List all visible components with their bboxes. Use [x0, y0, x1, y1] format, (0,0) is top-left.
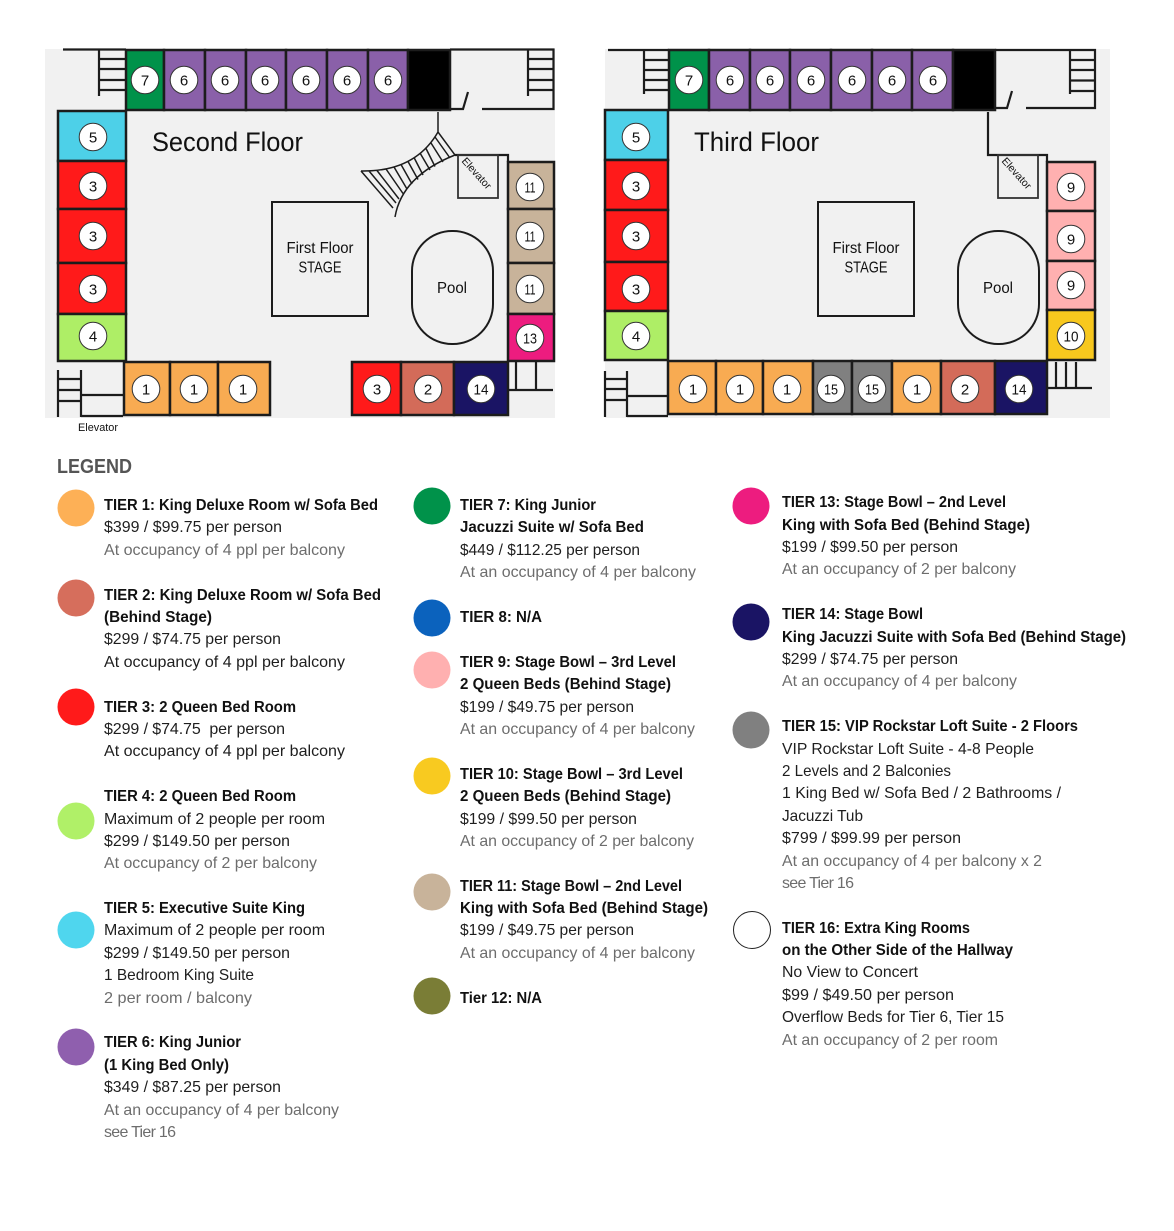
third floor tier number badges: 3 — [632, 228, 640, 246]
legend: tier 14: TIER 14: Stage Bowl — [782, 606, 923, 623]
panel: second floor plan — [45, 49, 555, 418]
legend: tier 15: see Tier 16 — [782, 875, 854, 892]
third floor tier number badges: 5 — [632, 130, 640, 146]
second floor tier number badges: 1 — [239, 382, 247, 398]
legend: tier 15: At an occupancy of 4 per balcony x 2 — [782, 853, 1042, 870]
second floor pool: Pool — [437, 280, 467, 297]
legend: tier 7: Jacuzzi Suite w/ Sofa Bed — [460, 519, 644, 536]
legend: tier 6: see Tier 16 — [104, 1124, 176, 1141]
second floor tier number badges: 6 — [384, 72, 392, 90]
second floor tier number badges: 6 — [302, 72, 310, 90]
legend: tier 3: TIER 3: 2 Queen Bed Room — [104, 699, 296, 716]
legend: tier 15: TIER 15: VIP Rockstar Loft Suite - 2 Floors — [782, 718, 1078, 735]
second floor tier number badges: 6 — [180, 72, 188, 90]
legend: tier 6: (1 King Bed Only) — [104, 1057, 229, 1074]
legend: tier 9 — [414, 652, 695, 738]
third floor tier number badges: 7 — [685, 72, 693, 90]
legend: tier 7: TIER 7: King Junior — [460, 497, 596, 514]
legend: tier 2 — [58, 580, 381, 671]
legend: tier 9: At an occupancy of 4 per balcony — [460, 721, 695, 738]
legend: tier 6: At an occupancy of 4 per balcony — [104, 1102, 339, 1119]
second floor room cells — [58, 50, 554, 415]
third floor tier number badges: 9 — [1067, 232, 1075, 248]
legend: tier 16: on the Other Side of the Hallway — [782, 942, 1013, 959]
legend: tier 1: TIER 1: King Deluxe Room w/ Sofa Bed — [104, 497, 378, 514]
second floor curved staircase — [361, 112, 455, 217]
second floor walls and stairs — [58, 50, 554, 417]
legend: tier 5 — [58, 900, 325, 1007]
legend: tier 10: At an occupancy of 2 per balcony — [460, 833, 694, 850]
second floor tier number badges: 6 — [343, 72, 351, 90]
legend: tier 16: TIER 16: Extra King Rooms — [782, 920, 970, 937]
legend: tier 5: 1 Bedroom King Suite — [104, 967, 254, 984]
legend: tier 2: $299 / $74.75 per person — [104, 631, 281, 648]
legend: tier 2: TIER 2: King Deluxe Room w/ Sofa Bed — [104, 587, 381, 604]
legend: tier 3: At occupancy of 4 ppl per balcony — [104, 743, 345, 760]
third floor tier number badges: 15 — [824, 382, 838, 398]
legend: tier 10 — [414, 758, 694, 850]
legend: tier 11: At an occupancy of 4 per balcony — [460, 945, 695, 962]
second floor tier number badges: 3 — [373, 382, 381, 398]
legend: tier 1: $399 / $99.75 per person — [104, 519, 282, 536]
third floor tier number badges: 10 — [1064, 328, 1078, 346]
label: ground elevator: Elevator — [78, 422, 118, 434]
second floor pool — [412, 231, 493, 344]
second floor tier number badges: 11 — [524, 282, 536, 298]
legend: tier 1: At occupancy of 4 ppl per balcony — [104, 542, 345, 559]
third floor tier number badges: 6 — [888, 72, 896, 90]
legend: tier 9: $199 / $49.75 per person — [460, 699, 634, 716]
legend: tier 3 — [58, 688, 345, 760]
second floor tier number badges: 1 — [142, 382, 150, 398]
legend: tier 10: TIER 10: Stage Bowl – 3rd Level — [460, 766, 683, 783]
legend: tier 11: $199 / $49.75 per person — [460, 922, 634, 939]
legend: tier 14: $299 / $74.75 per person — [782, 651, 958, 668]
legend: tier 15: VIP Rockstar Loft Suite - 4-8 People — [782, 741, 1034, 758]
legend: tier 2: At occupancy of 4 ppl per balcony — [104, 654, 345, 671]
legend: tier 11: TIER 11: Stage Bowl – 2nd Level — [460, 878, 682, 895]
legend: tier 11 — [414, 874, 708, 962]
legend: tier 14: King Jacuzzi Suite with Sofa Bed (Behind Stage) — [782, 629, 1126, 646]
third floor tier number badges: 6 — [766, 72, 774, 90]
second floor tier number badges: 2 — [424, 382, 432, 398]
third floor elevator: Elevator — [999, 155, 1034, 192]
third floor tier number badges: 2 — [961, 382, 969, 398]
legend: tier 7: $449 / $112.25 per person — [460, 542, 640, 559]
second floor tier number badges: 3 — [89, 282, 97, 298]
third floor room cells — [605, 50, 1095, 414]
legend: tier 16 — [734, 912, 1013, 1049]
legend: tier 16: $99 / $49.50 per person — [782, 987, 954, 1004]
legend: tier 12 — [414, 978, 542, 1014]
legend: tier 15: Jacuzzi Tub — [782, 808, 863, 825]
legend: tier 13 — [732, 488, 1030, 578]
legend: tier 13: King with Sofa Bed (Behind Stage) — [782, 517, 1030, 534]
second floor elevator: Elevator — [459, 155, 494, 192]
second floor tier number badges: 14 — [474, 382, 488, 398]
legend: tier 1 — [58, 490, 378, 559]
legend: tier 5: $299 / $149.50 per person — [104, 945, 290, 962]
legend: tier 6: TIER 6: King Junior — [104, 1034, 241, 1051]
legend: tier 4: At occupancy of 2 per balcony — [104, 855, 317, 872]
legend: tier 15 — [732, 712, 1078, 892]
legend: tier 13: TIER 13: Stage Bowl – 2nd Level — [782, 494, 1006, 511]
third floor tier number badges: 15 — [865, 382, 879, 398]
legend: tier 8 — [414, 600, 542, 636]
legend: tier 12: Tier 12: N/A — [460, 990, 542, 1007]
legend: tier 4: Maximum of 2 people per room — [104, 811, 325, 828]
legend: tier 3: $299 / $74.75 per person — [104, 721, 285, 738]
legend: tier 15: 2 Levels and 2 Balconies — [782, 763, 951, 780]
third floor tier number badges: 9 — [1067, 180, 1075, 196]
heading: second floor: Second Floor — [152, 127, 303, 157]
legend: tier 16: No View to Concert — [782, 964, 919, 981]
second floor tier number badges: 13 — [523, 330, 537, 348]
third floor walls and stairs — [605, 50, 1095, 417]
second floor tier number badges: 11 — [524, 228, 536, 246]
second floor tier number badges: 6 — [221, 72, 229, 90]
second floor tier number badges: 4 — [89, 328, 97, 346]
legend: tier 11: King with Sofa Bed (Behind Stage) — [460, 900, 708, 917]
third floor tier number badges: 1 — [913, 382, 921, 398]
legend: tier 2: (Behind Stage) — [104, 609, 212, 626]
heading: third floor: Third Floor — [694, 127, 819, 157]
third floor tier number badges: 3 — [632, 282, 640, 298]
second floor tier number badges: 5 — [89, 130, 97, 146]
legend: tier 13: $199 / $99.50 per person — [782, 539, 958, 556]
third floor tier number badges: 9 — [1067, 278, 1075, 294]
legend: tier 14 — [732, 604, 1126, 690]
legend: tier 16: Overflow Beds for Tier 6, Tier 15 — [782, 1009, 1004, 1026]
third floor stage: First Floor — [832, 240, 900, 257]
legend: tier 14: At an occupancy of 4 per balcony — [782, 673, 1017, 690]
third floor stage — [818, 202, 914, 316]
third floor pool: Pool — [983, 280, 1013, 297]
third floor tier number badges: 1 — [736, 382, 744, 398]
third floor tier number badges: 14 — [1012, 382, 1026, 398]
legend: tier 6 — [58, 1028, 339, 1141]
legend: tier 4 — [58, 788, 325, 872]
third floor stage: STAGE — [844, 260, 888, 276]
legend: tier 4: TIER 4: 2 Queen Bed Room — [104, 788, 296, 805]
second floor tier number badges: 1 — [190, 382, 198, 398]
second floor stage — [272, 202, 368, 316]
legend: tier 10: $199 / $99.50 per person — [460, 811, 637, 828]
second floor tier number badges: 6 — [261, 72, 269, 90]
second floor stage: First Floor — [286, 240, 354, 257]
third floor tier number badges: 1 — [689, 382, 697, 398]
second floor tier number badges: 7 — [141, 72, 149, 90]
second floor tier number badges: 11 — [524, 180, 536, 196]
heading: legend: LEGEND — [57, 456, 132, 478]
legend: tier 9: 2 Queen Beds (Behind Stage) — [460, 676, 671, 693]
legend: tier 8: TIER 8: N/A — [460, 609, 542, 626]
third floor tier number badges: 6 — [929, 72, 937, 90]
legend: tier 15: 1 King Bed w/ Sofa Bed / 2 Bathrooms / — [782, 785, 1062, 802]
third floor tier number badges — [622, 66, 1085, 403]
legend: tier 15: $799 / $99.99 per person — [782, 830, 961, 847]
legend: tier 5: 2 per room / balcony — [104, 990, 252, 1007]
second floor tier number badges: 3 — [89, 178, 97, 196]
legend: tier 5: Maximum of 2 people per room — [104, 922, 325, 939]
legend: tier 7 — [414, 488, 696, 581]
third floor tier number badges: 6 — [807, 72, 815, 90]
legend: tier 6: $349 / $87.25 per person — [104, 1079, 281, 1096]
third floor tier number badges: 6 — [726, 72, 734, 90]
second floor tier number badges: 3 — [89, 228, 97, 246]
third floor tier number badges: 6 — [848, 72, 856, 90]
legend: tier 7: At an occupancy of 4 per balcony — [460, 564, 696, 581]
third floor pool — [958, 231, 1039, 344]
third floor tier number badges: 3 — [632, 178, 640, 196]
second floor tier number badges — [79, 66, 544, 403]
second floor stage: STAGE — [298, 260, 342, 276]
legend: tier 13: At an occupancy of 2 per balcony — [782, 561, 1016, 578]
legend: tier 9: TIER 9: Stage Bowl – 3rd Level — [460, 654, 676, 671]
panel: third floor plan — [605, 49, 1110, 418]
legend: tier 4: $299 / $149.50 per person — [104, 833, 290, 850]
legend: tier 10: 2 Queen Beds (Behind Stage) — [460, 788, 671, 805]
legend: tier 5: TIER 5: Executive Suite King — [104, 900, 305, 917]
third floor tier number badges: 4 — [632, 328, 640, 346]
legend: tier 16: At an occupancy of 2 per room — [782, 1032, 998, 1049]
third floor tier number badges: 1 — [783, 382, 791, 398]
